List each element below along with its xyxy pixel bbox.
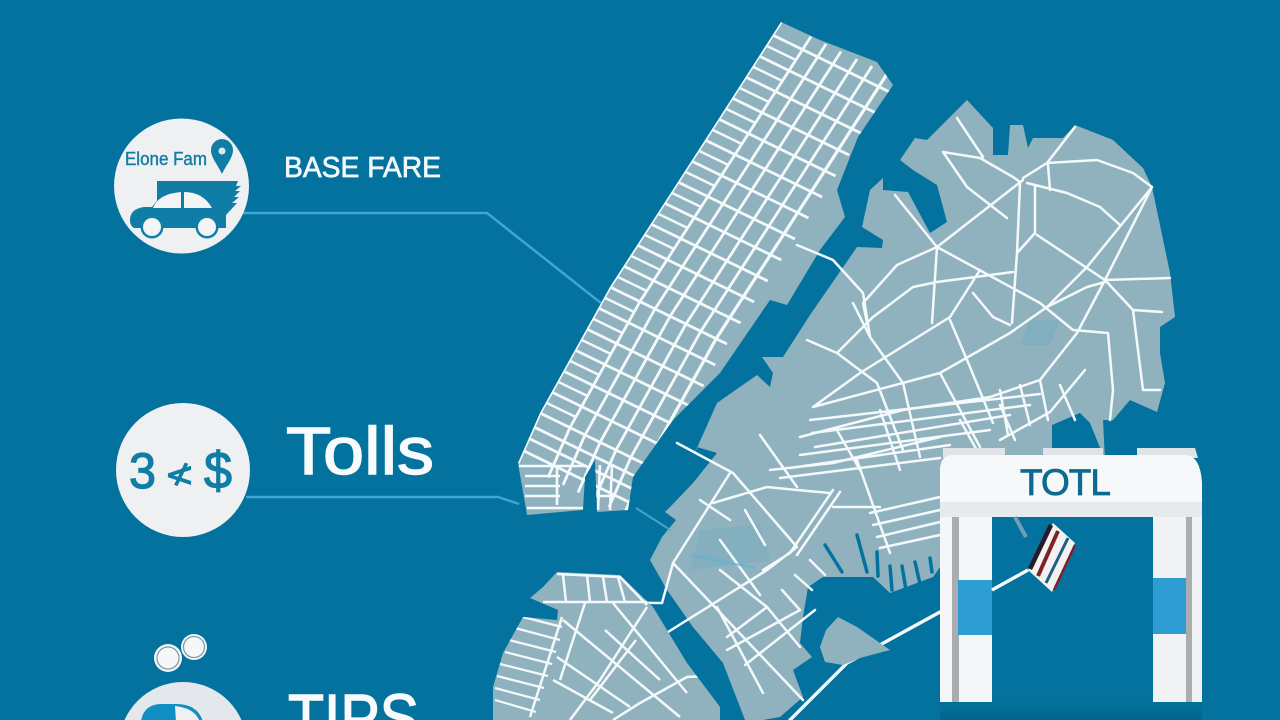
map: Manhattan <box>518 22 893 515</box>
gate roof tabs <box>943 448 1198 458</box>
map: Brooklyn and Queens <box>542 100 1175 720</box>
right pillar <box>1153 517 1202 702</box>
base fare icon <box>114 118 249 254</box>
icon label: Elone Fam <box>125 149 207 169</box>
map of city boroughs <box>493 22 1175 720</box>
avenues <box>518 22 887 515</box>
toll gate <box>940 448 1202 720</box>
map: south-west district <box>493 572 722 720</box>
road stub behind gate <box>1015 517 1026 537</box>
heading: base fare: BASE FARE <box>284 152 441 184</box>
flag <box>1028 523 1075 592</box>
gate ground shadow <box>940 690 1202 720</box>
tolls icon <box>116 403 250 537</box>
river inlet shading <box>690 525 770 570</box>
icon: location pin <box>211 139 233 174</box>
tolls icon: $ <box>204 442 232 500</box>
gate label: TOTL <box>1020 462 1111 503</box>
leader line: base fare <box>243 213 611 311</box>
short cross streets <box>546 46 796 417</box>
long cross streets <box>522 35 890 507</box>
map: small island <box>820 617 890 665</box>
tolls icon: ≮ <box>164 455 195 495</box>
icon symbols: 3 <box>129 443 156 499</box>
heading: tolls: Tolls <box>286 414 434 489</box>
road network <box>542 118 1170 720</box>
shoreline inlets <box>825 535 932 590</box>
coins icon <box>154 634 207 672</box>
leader line: tolls <box>246 497 519 504</box>
tips icon <box>119 682 247 720</box>
faint bridge lines <box>636 508 755 568</box>
gate header <box>940 455 1202 502</box>
left pillar <box>940 517 992 702</box>
battery streets <box>519 465 615 510</box>
icon: car <box>130 181 241 238</box>
